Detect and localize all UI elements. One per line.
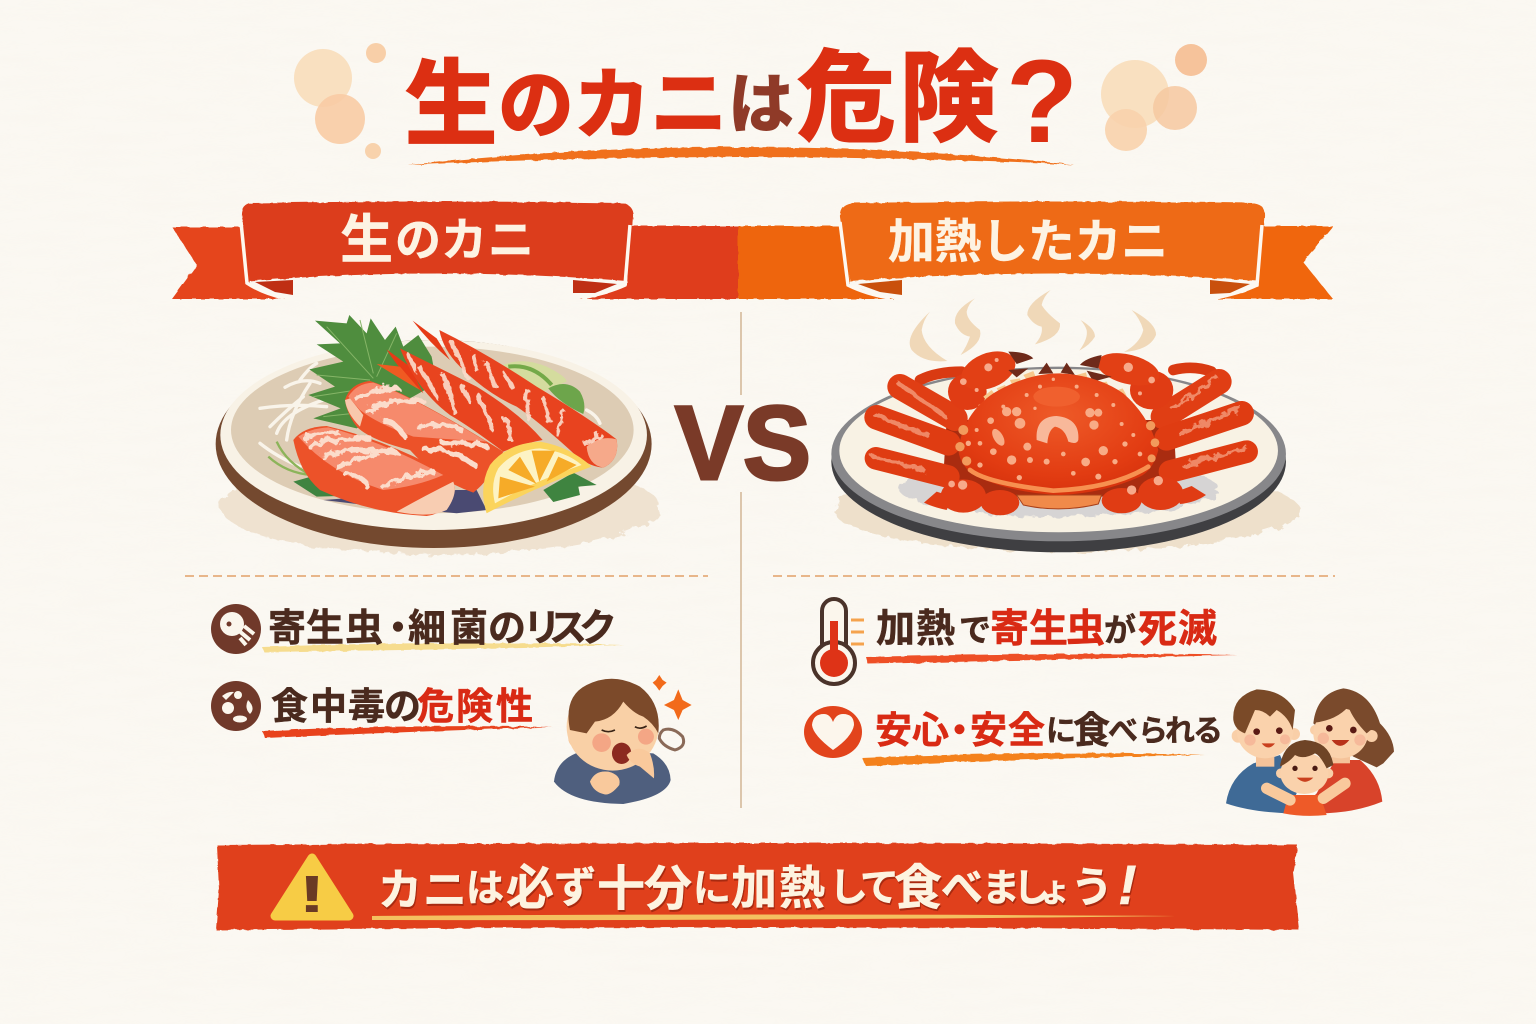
red underline (262, 726, 553, 738)
hands (627, 749, 654, 778)
crab leg 4 (413, 321, 617, 468)
message: ず (554, 864, 596, 911)
red underline (866, 654, 1237, 664)
decorative circles left of title (294, 43, 386, 159)
band: raw side (580, 226, 738, 299)
icon: heart (804, 706, 862, 758)
crab meat 1 (293, 426, 455, 516)
bottom warning banner (216, 843, 1299, 930)
orange underline (862, 753, 1205, 766)
crab meat 2 (345, 381, 503, 493)
plate shadow (833, 468, 1300, 552)
message: べ (941, 864, 983, 911)
head (567, 679, 659, 771)
center divider (740, 312, 742, 808)
message: 食 (894, 862, 942, 915)
carapace spikes (978, 371, 1133, 412)
title: 危 (796, 43, 896, 155)
message: は (466, 868, 504, 910)
point: safe to eat (804, 706, 1223, 766)
sparkle (653, 675, 692, 720)
label: 寄生虫・細菌のリスク (268, 608, 617, 650)
title: 生 (404, 52, 498, 157)
lower claws (924, 476, 1206, 515)
plate (831, 367, 1286, 552)
label: 寄生虫 (990, 608, 1105, 651)
claws (948, 344, 1173, 410)
point: heat kills parasites (813, 599, 1237, 684)
ribbon: 加熱したカニ (840, 202, 1265, 298)
ribbon label: ニ (488, 214, 534, 266)
ribbon: 生のカニ (241, 202, 633, 298)
label: に (1046, 715, 1076, 748)
title: は (728, 67, 794, 141)
dish shadow (323, 490, 487, 513)
legs: left (873, 372, 962, 477)
message: ょ (1039, 872, 1071, 908)
ribbon label: の (395, 214, 441, 266)
child (1267, 740, 1345, 816)
point: food poisoning danger (211, 681, 553, 738)
band: heated side (738, 226, 895, 299)
label: が (1104, 612, 1136, 648)
cucumber (503, 361, 584, 414)
message: う (1071, 864, 1113, 911)
yellow underline (372, 914, 1175, 920)
lemon wedge (483, 442, 592, 513)
icon: germs (211, 681, 261, 731)
message: に (693, 868, 731, 910)
icon: thermometer (813, 599, 864, 684)
legs: right (1163, 368, 1247, 472)
message: 必 (506, 862, 554, 915)
shiso leaf (308, 315, 437, 428)
title: ニ (650, 60, 728, 148)
message: して (829, 867, 899, 910)
label: 加熱 (876, 608, 955, 651)
highlight underline (262, 643, 624, 652)
label: 食中毒の (271, 686, 421, 727)
label: 安心・安全 (875, 710, 1045, 751)
father (1226, 689, 1300, 813)
plate shadow (220, 458, 660, 555)
garnish leaves (268, 442, 597, 502)
title: ? (1006, 36, 1078, 168)
steam (910, 290, 1156, 361)
mother (1310, 688, 1394, 813)
crab underside (1017, 495, 1102, 509)
point: parasites and bacteria risk (211, 604, 624, 654)
ribbon label: 生 (340, 211, 393, 270)
band: right tail (1215, 226, 1333, 299)
carapace (955, 373, 1159, 495)
label: 死滅 (1138, 608, 1217, 651)
claw right (1080, 347, 1173, 409)
label: 食 (1073, 710, 1110, 751)
legs (873, 368, 1247, 477)
message: 加熱 (731, 862, 825, 914)
VS mark: VS (675, 385, 811, 502)
body shadow (943, 420, 1177, 497)
shredded radish (260, 363, 600, 467)
title: の (498, 64, 574, 149)
label: で (959, 612, 991, 648)
plate (216, 340, 652, 548)
message: カニ (378, 866, 467, 915)
raw crab plate illustration (216, 315, 660, 555)
claw left (948, 344, 1033, 410)
message: 十分 (597, 863, 692, 916)
title underline brush (408, 147, 1075, 165)
label: 危険性 (417, 686, 533, 727)
ribbon label: 加熱したカニ (888, 215, 1168, 268)
icon: warning triangle (275, 858, 349, 924)
ribbon band (172, 226, 1333, 299)
queasy puff (659, 729, 684, 750)
ribbon label: カ (441, 214, 487, 266)
message: ! (1118, 853, 1137, 916)
dashed divider right (773, 575, 1335, 577)
icon: parasite (211, 604, 261, 654)
body (554, 750, 671, 804)
crab leg 3 (377, 348, 543, 452)
dashed divider left (185, 575, 708, 577)
cooked crab plate illustration (831, 290, 1300, 552)
label: べられる (1108, 715, 1223, 748)
decorative circles right of title (1101, 44, 1207, 151)
band: left tail (172, 227, 285, 299)
exclamation mark: ! (298, 866, 326, 924)
happy family illustration (1226, 688, 1394, 816)
message: まし (982, 868, 1051, 910)
title: 険 (899, 43, 999, 155)
title: カ (573, 61, 651, 149)
sick child illustration (554, 675, 692, 804)
eye spines (1038, 363, 1075, 375)
